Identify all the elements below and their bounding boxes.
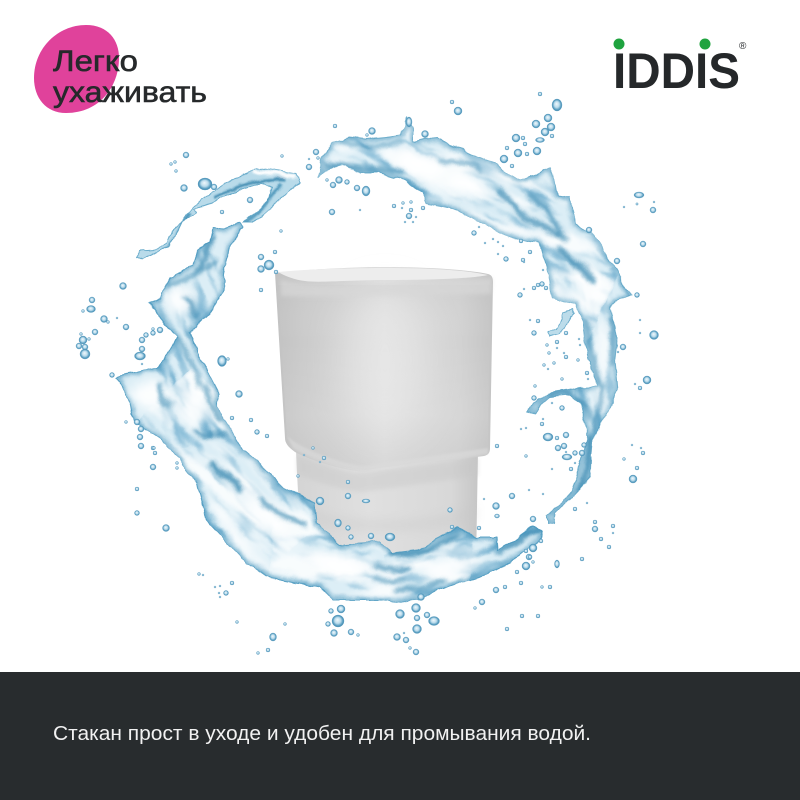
heading: Легко ухаживать: Легко [53,45,138,78]
frosted glass cup [275,267,493,565]
water texture [139,245,541,602]
logo: IDDIS: IDDIS [613,43,740,99]
water: small tendril [547,310,574,336]
footer caption: Стакан прост в уходе и удобен для промывания водой. [53,723,591,745]
cup lower lower-band [300,505,476,531]
water splash ring [116,116,632,603]
pink blob [34,25,119,113]
rim front shadow [280,278,492,297]
water droplets [76,92,658,655]
water texture [318,120,629,436]
logo green dots [614,38,710,50]
footer band [0,672,800,800]
badge: pink blob with heading [34,25,207,113]
cup body shading [278,285,490,470]
cup rim opening [278,268,488,282]
cup inner glow [345,290,425,430]
cup step highlight [287,436,488,471]
cup lower section [296,450,478,565]
water: upper right arc [318,116,632,524]
water: left body and bottom arc [116,222,543,603]
heading: Легко ухаживать: ухаживать [53,76,207,109]
cup lower band shadow [297,455,478,492]
registered mark: ® [739,41,747,52]
cup upper body [275,267,493,472]
water: upper left loop [136,168,300,260]
